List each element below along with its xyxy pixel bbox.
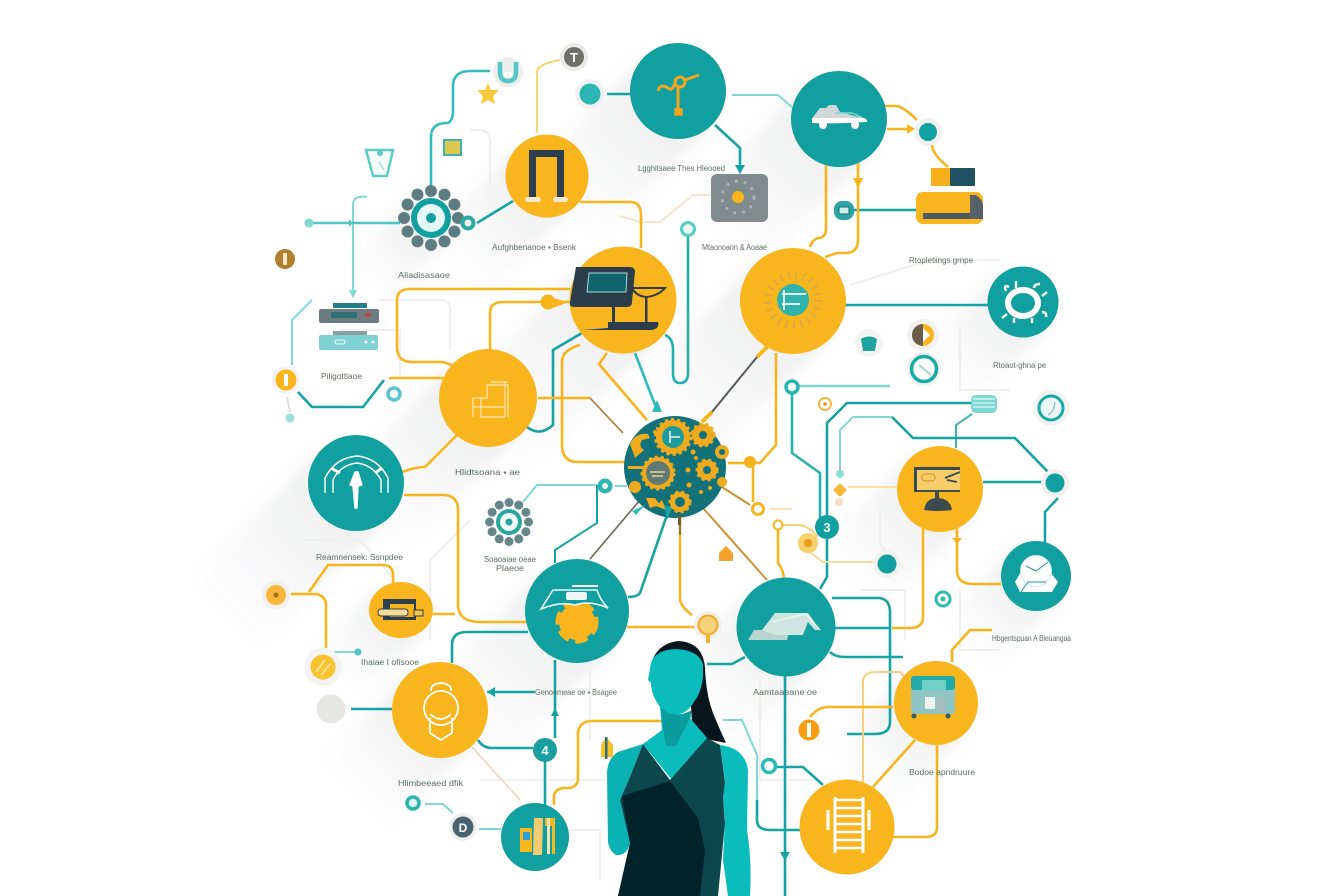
node: teal dot right top: [914, 118, 942, 146]
label: lower gear line two: Plaeoe: [496, 564, 525, 573]
icon: crane: [658, 75, 699, 115]
node: pale drop: [286, 397, 294, 422]
circle: teal arch figure: [308, 435, 404, 531]
icon: striped pill: [971, 395, 997, 413]
label: cog: Rtoaot-ghna pe: [993, 361, 1047, 370]
node: small ring by gear: [460, 216, 476, 230]
needle: sun to hub: [702, 347, 767, 422]
pale connector lines: [292, 71, 972, 829]
node: yellow small ring centre: [823, 402, 827, 406]
node: number 4: [533, 738, 557, 762]
circle: yellow machine: [894, 661, 978, 745]
neck shade: [661, 708, 692, 746]
gear: bottom: [670, 492, 690, 512]
gear fragments and decorations: [628, 430, 729, 510]
node: yellow I badge: [272, 366, 300, 394]
circle: yellow monitor: [570, 246, 676, 354]
circle: top teal crane: [630, 43, 726, 139]
node: number 4: 4: [541, 743, 549, 758]
node: number 3: 3: [823, 520, 831, 535]
node: teal ring left of hub: [598, 478, 612, 494]
label: lower gear line one: Soaoaiae oeae: [484, 555, 537, 564]
circle: teal house cards: [736, 578, 836, 676]
icon: gear lower: [485, 498, 533, 546]
circle: teal cog: [988, 266, 1058, 338]
gear: right: [697, 460, 717, 480]
label: robot arrow: Genoomeae oe ▪ Bsagee: [535, 688, 617, 697]
node: target ring: [936, 592, 950, 606]
circle: yellow right monitor: [897, 446, 983, 532]
dress dark body: [618, 781, 705, 896]
node: teal ring top: [682, 222, 694, 236]
label: book: Reamnensek: Ssnpdee: [316, 553, 404, 562]
label: house: Aamtaaeane oe: [753, 688, 818, 697]
icon: robot head: [424, 683, 458, 740]
icon: tools: [520, 818, 555, 855]
node: yellow small ring: [819, 398, 831, 410]
node: number 3: [815, 515, 839, 539]
circle: yellow sun: [740, 248, 846, 354]
icon: monitor and glass: [570, 267, 665, 330]
label: gear: Aliadisasaoe: [398, 271, 451, 280]
icon: battery: [916, 168, 983, 224]
faint background traces: [300, 130, 1010, 880]
icon: gear sun: [768, 275, 818, 325]
circle: teal clock face: [1001, 541, 1071, 611]
node: yellow rings: [752, 504, 782, 530]
icon: ring gauge: [907, 352, 941, 386]
icon: car: [812, 105, 867, 129]
label: chip: Mtaonoann & Aoaae: [702, 243, 767, 252]
icon: shield: [366, 150, 393, 176]
central gear hub: [624, 416, 729, 518]
icon: yellow tag: [601, 737, 613, 759]
node: gray disc: [316, 694, 346, 724]
dress top band: [618, 738, 725, 896]
label: battery: Rtopletiings grnpe: [909, 256, 974, 265]
icon: gold coin: [304, 648, 342, 686]
teal connector lines: [298, 71, 1058, 896]
left arm: [607, 744, 643, 855]
circle: yellow robot head: [392, 662, 488, 758]
node: padlock: [694, 611, 722, 643]
icon: server stack: [319, 303, 379, 350]
icon: arch and figure: [325, 456, 388, 508]
icon: gear top left: [398, 185, 464, 251]
node: pale dot and diamond: [833, 470, 847, 506]
circle: yellow ladder: [800, 780, 894, 874]
node: D badge: D: [459, 821, 468, 835]
label: coin: Ihaiae I ofisooe: [361, 658, 420, 667]
icon: hat and gear: [541, 586, 608, 640]
icon: book machine: [378, 599, 423, 620]
gear: top right: [692, 424, 714, 446]
node: white ring teal: [786, 381, 798, 393]
soft cast shadows: [188, 57, 1061, 872]
icon: star: [477, 83, 499, 104]
arrow tips: [349, 124, 962, 861]
circle: yellow stair: [439, 349, 537, 447]
node: teal ring: [388, 388, 400, 400]
label: gate: Aufghbenanoe ▪ Bsenk: [492, 243, 577, 252]
gear: centre left with face: [642, 457, 674, 489]
circle: teal tools: [501, 803, 569, 871]
node: teal ring bottom: [762, 760, 776, 772]
node: amber target: [798, 533, 818, 553]
yellow connector lines: [291, 60, 1001, 837]
node: teal dot lower: [873, 550, 901, 578]
gear: top: [656, 420, 690, 454]
node: target left: [262, 581, 290, 609]
node: teal dot right: [1041, 469, 1069, 497]
circle: yellow gate: [506, 134, 588, 218]
node: teal dot top: [575, 79, 605, 109]
icon: half disc: [907, 319, 939, 351]
right arm: [720, 745, 751, 896]
panel: chip box: [711, 174, 768, 222]
node: T badge: T: [570, 50, 578, 65]
hair: [650, 641, 726, 743]
icon: machine: [911, 676, 955, 718]
hub spokes tips: [632, 400, 681, 525]
labels: [316, 164, 1071, 788]
icon: gauge: [1033, 390, 1069, 426]
icon: yellow square: [444, 140, 461, 155]
node: D badge: [449, 813, 477, 841]
icon: stair frame: [473, 382, 508, 417]
icon: small orange house: [719, 546, 733, 561]
label: bottom left: Hlimbeeaed dfik: [398, 779, 464, 788]
icon: teal hat: [855, 329, 883, 357]
icon: gate: [525, 150, 568, 202]
label: machine top: Hbgentspuan A Bieuangaa: [992, 634, 1071, 643]
circle: teal car: [791, 71, 887, 167]
node: orange I badge: [798, 720, 820, 740]
node: T badge: [560, 43, 588, 71]
label: gate top: Lgghitsaee Thes Hleooed: [638, 164, 725, 173]
circle: teal hat and gear: [525, 559, 629, 663]
icon: U bracket: [493, 57, 523, 87]
head and neck: [643, 649, 707, 780]
person silhouette: [607, 641, 751, 896]
icon: desk monitor: [914, 467, 960, 511]
node: pale dot left: [304, 218, 314, 228]
label: hub left: Hlidtsoana ▪ ae: [455, 468, 521, 477]
circle: yellow book: [369, 582, 433, 638]
node: teal O: [407, 797, 419, 809]
node: brown badge: [275, 249, 295, 269]
node: small screen badge: [834, 201, 854, 220]
label: machine bottom: Bodoe apndruure: [909, 768, 976, 777]
label: server: Piligottiaoe: [321, 372, 363, 381]
icon: clock bust: [1015, 556, 1058, 592]
icon: cog: [1002, 281, 1047, 323]
icon: ladder: [828, 797, 869, 853]
icon: cards: [748, 613, 820, 640]
